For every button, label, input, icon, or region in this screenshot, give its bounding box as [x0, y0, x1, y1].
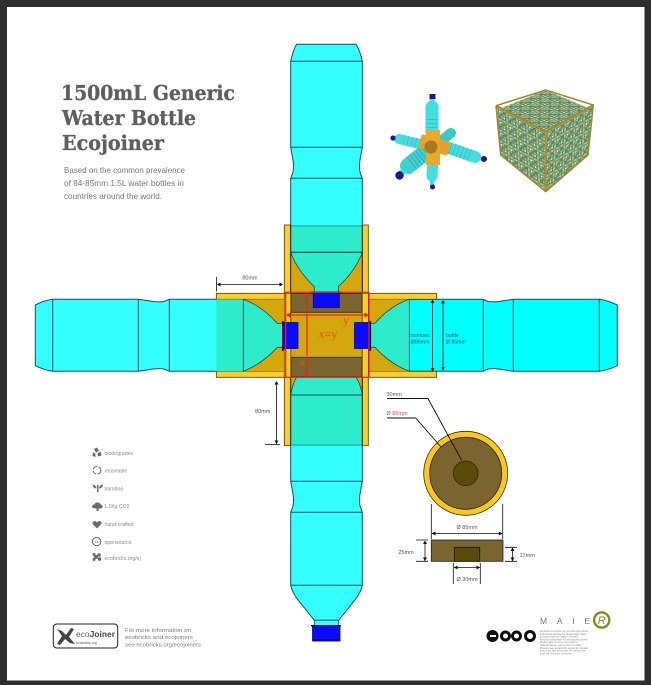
ecojoiner top view diagram: 30mm	[386, 392, 402, 398]
license fine print: Original design and concept by Maier	[540, 643, 582, 647]
maier logo	[540, 612, 609, 628]
license fine print: Ecobricks & ecojoiners are free and open source	[540, 629, 588, 633]
dimension: bombeo: Ø86mm	[411, 340, 429, 346]
red measurement overlay	[286, 292, 369, 377]
dimension: bottle: bottle	[446, 333, 459, 339]
maier logo: R	[598, 615, 606, 627]
icon: 3D cube lattice of ecojoiners	[495, 89, 594, 193]
icon: bamboo	[92, 484, 103, 492]
ecojoiner logo	[53, 624, 118, 648]
cube left face	[496, 107, 545, 190]
icon: open source: cc	[95, 539, 99, 544]
vertical yellow sleeve	[284, 225, 368, 446]
ecojoiner frame cross-section	[216, 225, 437, 446]
horizontal right bottle	[409, 299, 617, 371]
title	[61, 81, 235, 155]
title: Ecojoiner	[62, 131, 165, 155]
license fine print: and adapt under the Creative Commons	[540, 635, 578, 639]
label: y: y	[343, 313, 349, 327]
label: x=y: x=y	[319, 327, 337, 341]
dimension: bombeo	[411, 300, 434, 372]
feature labels: opensource	[104, 540, 132, 546]
gold interior	[291, 252, 362, 395]
tinted bottle ends inside sleeve	[216, 225, 409, 446]
lower bottle cone	[291, 377, 362, 395]
icon: biodegrades	[92, 448, 102, 457]
dimension: side 80mm	[255, 381, 280, 444]
vertical top bottle	[291, 44, 362, 253]
label: x: x	[299, 355, 305, 369]
blue cap top	[311, 292, 342, 308]
feature labels: biodegrades	[104, 451, 133, 457]
license fine print: Please give credit to the authors.	[540, 640, 578, 644]
blue cap left	[282, 321, 298, 351]
feature labels: reuseable	[104, 468, 127, 474]
dimension: bombeo: bombeo	[411, 333, 430, 339]
license fine print: Attribution-ShareAlike 4.0 International License.	[540, 637, 588, 641]
intro text: countries around the world.	[64, 192, 162, 201]
icon: reuseable	[93, 466, 101, 474]
maier logo: MAIE	[540, 616, 590, 626]
ecojoiner side view diagram: Ø 85mm	[456, 525, 478, 531]
title: 1500mL Generic	[61, 81, 235, 105]
license fine print: technologies developed by Russell Maier. Share	[540, 632, 586, 636]
feature list	[92, 448, 141, 562]
more information text: see ecobricks.org/ecojoiners	[125, 642, 201, 648]
yellow walls in hub	[284, 293, 368, 377]
ecojoiner top view diagram: Ø 86mm	[386, 411, 408, 417]
ecojoiner logo: ecoJoiner	[76, 629, 116, 639]
dimension: top 80mm	[216, 276, 283, 292]
ecojoiner logo: ecobricks.org	[76, 641, 97, 645]
feature labels: 1.1Kg CO2	[104, 504, 130, 510]
more information text: For more information on	[125, 628, 191, 634]
horizontal left bottle	[35, 299, 243, 371]
ecojoiner side view diagram	[398, 504, 535, 584]
feature labels	[104, 451, 141, 562]
title: Water Bottle	[61, 106, 196, 130]
license fine print	[540, 629, 589, 655]
more information text: ecobricks and ecojoiners	[125, 635, 193, 641]
ecojoiner side view diagram: 25mm	[398, 550, 414, 556]
dimension: top 80mm: 80mm	[242, 276, 258, 282]
left bottle cone	[243, 299, 283, 371]
license fine print: and for the use of these	[540, 651, 572, 655]
ecojoiner side view diagram: Ø 30mm	[456, 577, 478, 583]
feature labels: ecobricks.org/ej	[104, 556, 141, 562]
dimension: bottle: Ø 85mm	[446, 340, 466, 346]
intro text: Based on the common prevalence	[64, 166, 185, 175]
more information text	[125, 628, 201, 648]
right bottle cone	[370, 299, 409, 371]
dimension: bottle	[441, 300, 466, 370]
creative commons badges	[486, 630, 536, 642]
dimension: side 80mm: 80mm	[255, 409, 271, 415]
ecojoiner top view diagram	[386, 392, 508, 515]
brown sockets	[291, 294, 362, 377]
icon: cloud tree	[92, 502, 103, 511]
intro text: of 84-85mm 1.5L water bottles in	[64, 179, 184, 188]
cube top face	[502, 90, 587, 131]
icon: heart	[93, 521, 101, 528]
intro text	[64, 166, 185, 201]
blue cap right	[354, 321, 371, 351]
horizontal yellow sleeve	[216, 293, 437, 377]
feature labels: hand-crafted	[104, 522, 134, 528]
icon: ecobricks	[92, 553, 101, 561]
cube right face	[546, 106, 592, 190]
feature labels: bamboo	[104, 486, 123, 492]
vertical bottom bottle	[291, 395, 362, 620]
bottom bottle neck and cap	[311, 620, 341, 641]
top bottle cone	[291, 252, 362, 292]
ecojoiner side view diagram: 17mm	[520, 553, 535, 559]
license fine print: Please see ecobricks.org/ej for details	[540, 646, 589, 650]
license fine print: and more plans and guides for making them	[540, 649, 586, 653]
icon: 3D ecojoiner jack with bottles	[390, 94, 487, 190]
